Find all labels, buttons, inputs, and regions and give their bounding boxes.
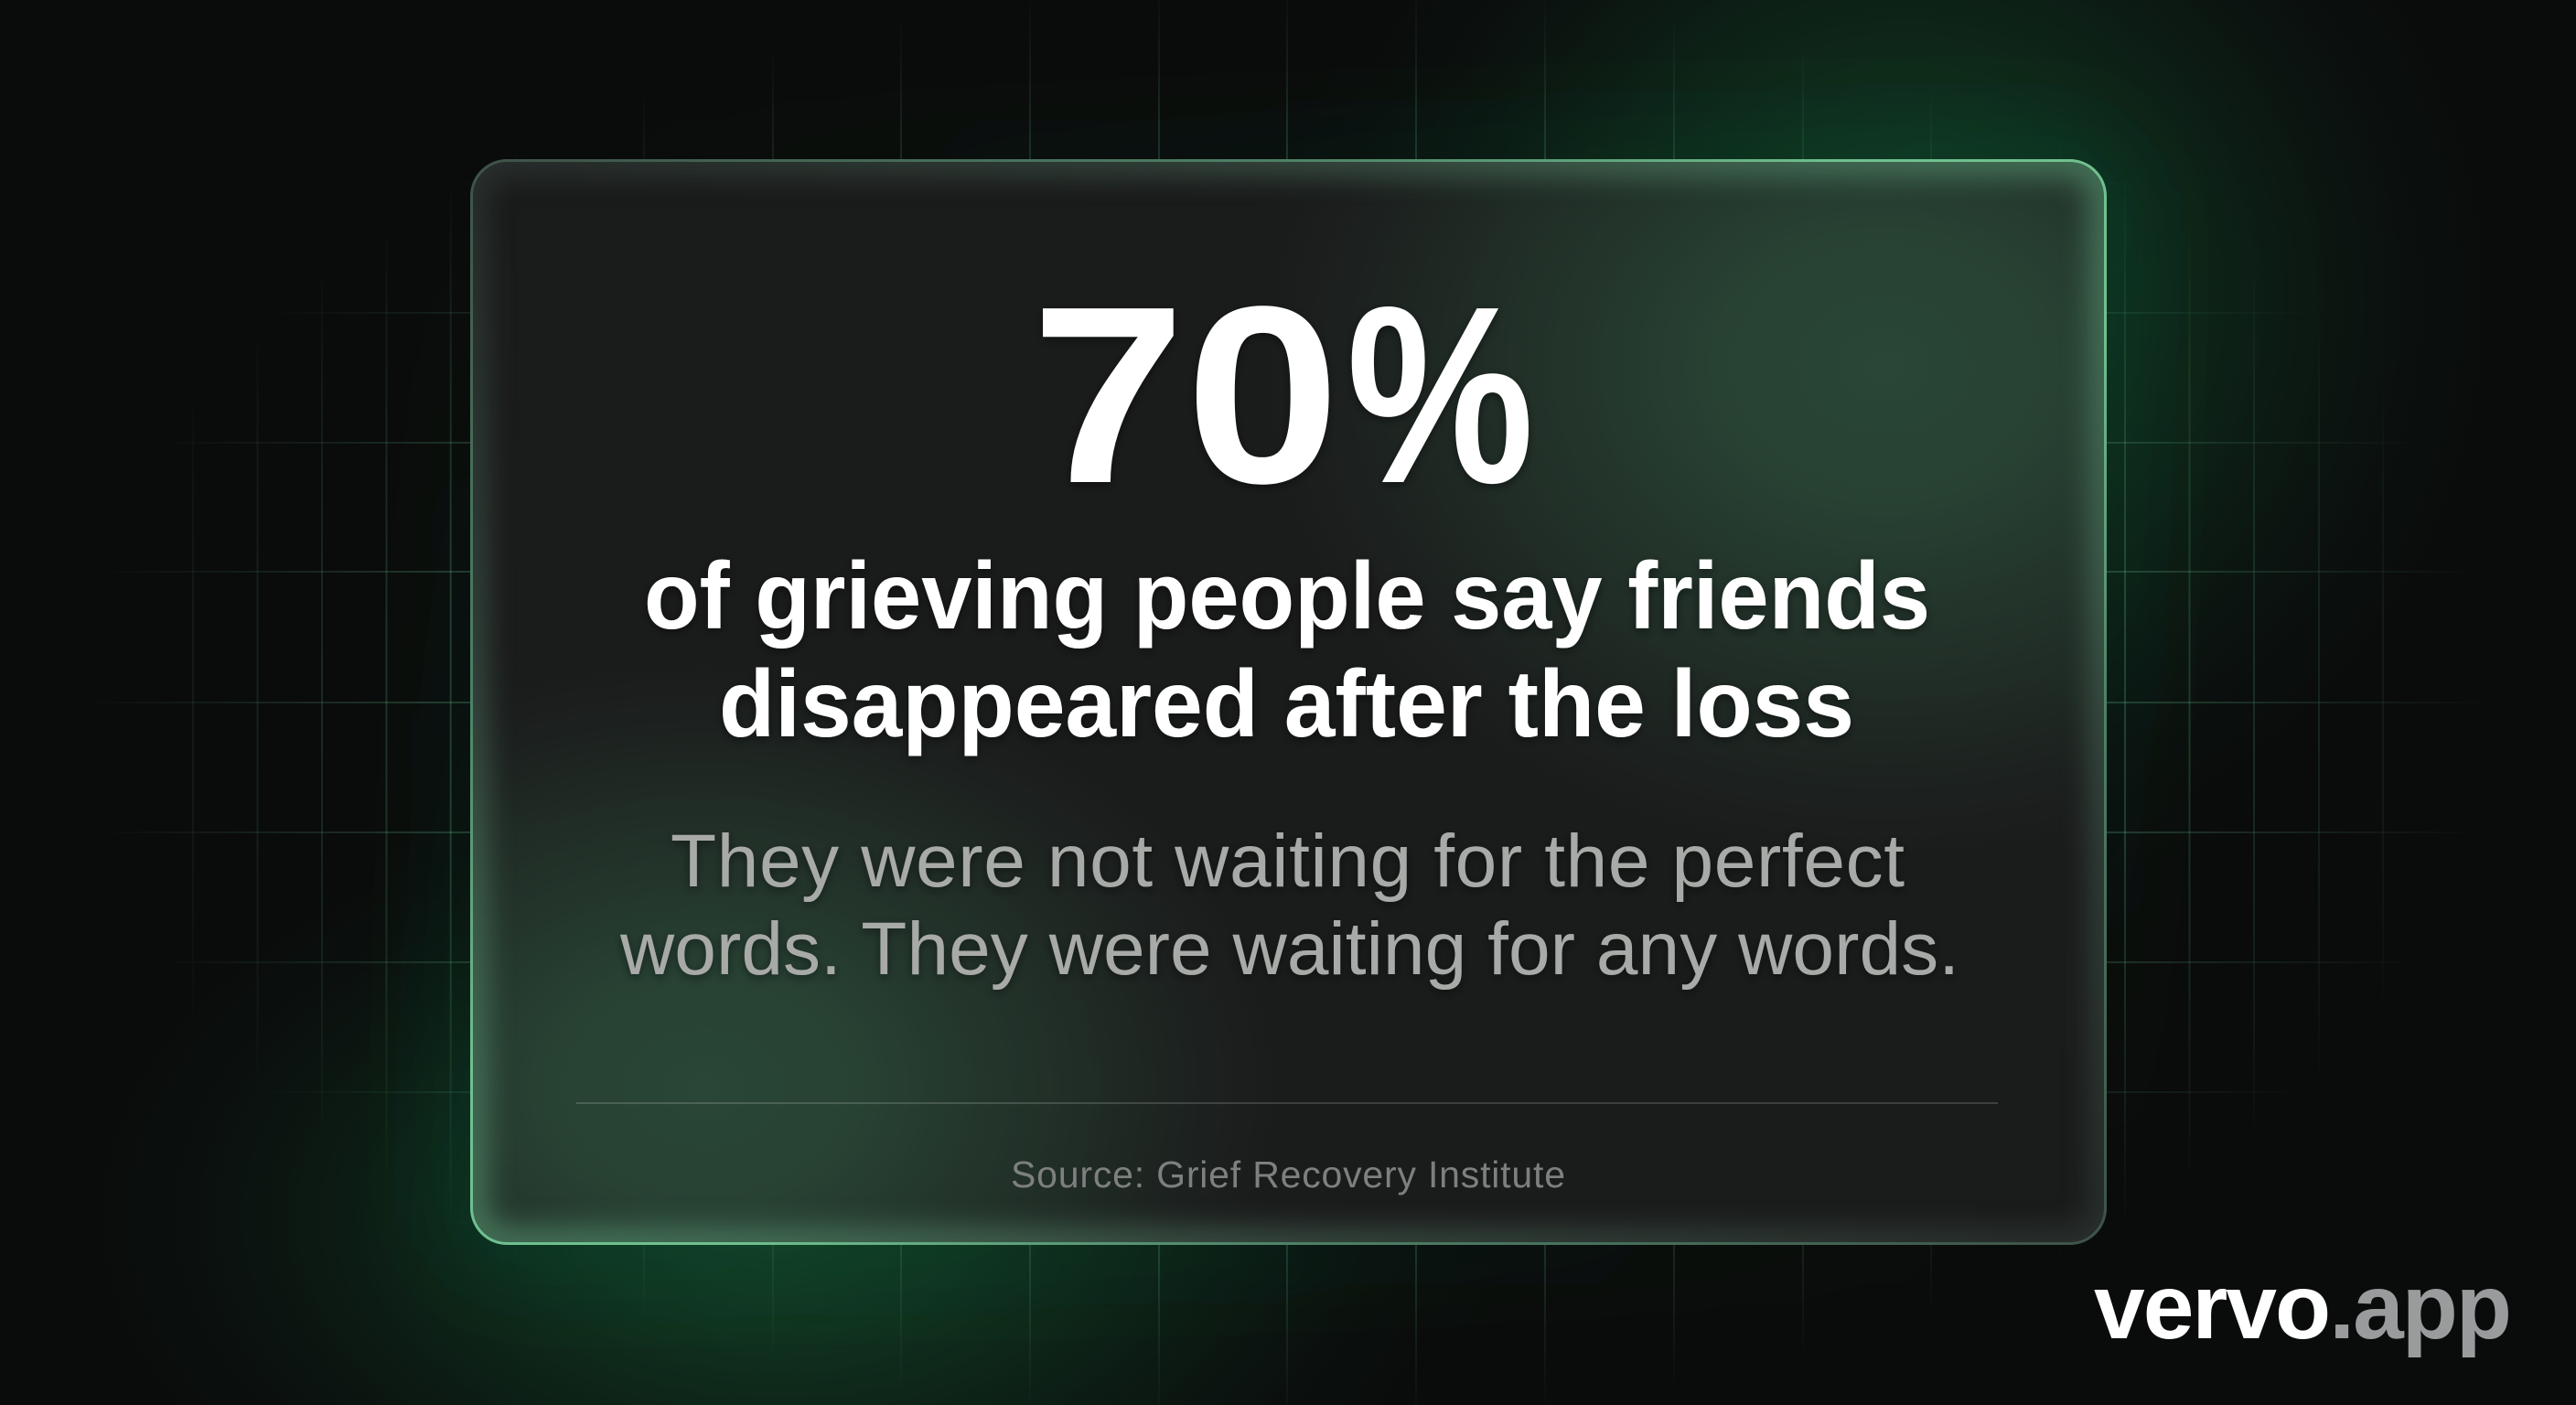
headline [644,543,1930,757]
supporting line 1: They were not waiting for the perfect [671,820,1905,903]
card border [472,161,2106,1244]
big statistic: 70%: 70 [1031,254,1340,536]
headline line 2: disappeared after the loss [719,651,1854,757]
source line: Source: Grief Recovery Institute [1011,1153,1565,1196]
big statistic: 70%: % [1347,254,1534,536]
divider [576,1102,1998,1104]
supporting line 2: words. They were waiting for any words. [619,907,1959,991]
card surface [470,159,2107,1245]
brand logo: vervo.app: vervo.app [2094,1256,2512,1358]
supporting text [619,820,1959,991]
panel: glass card [470,159,2107,1245]
headline line 1: of grieving people say friends [644,543,1930,649]
